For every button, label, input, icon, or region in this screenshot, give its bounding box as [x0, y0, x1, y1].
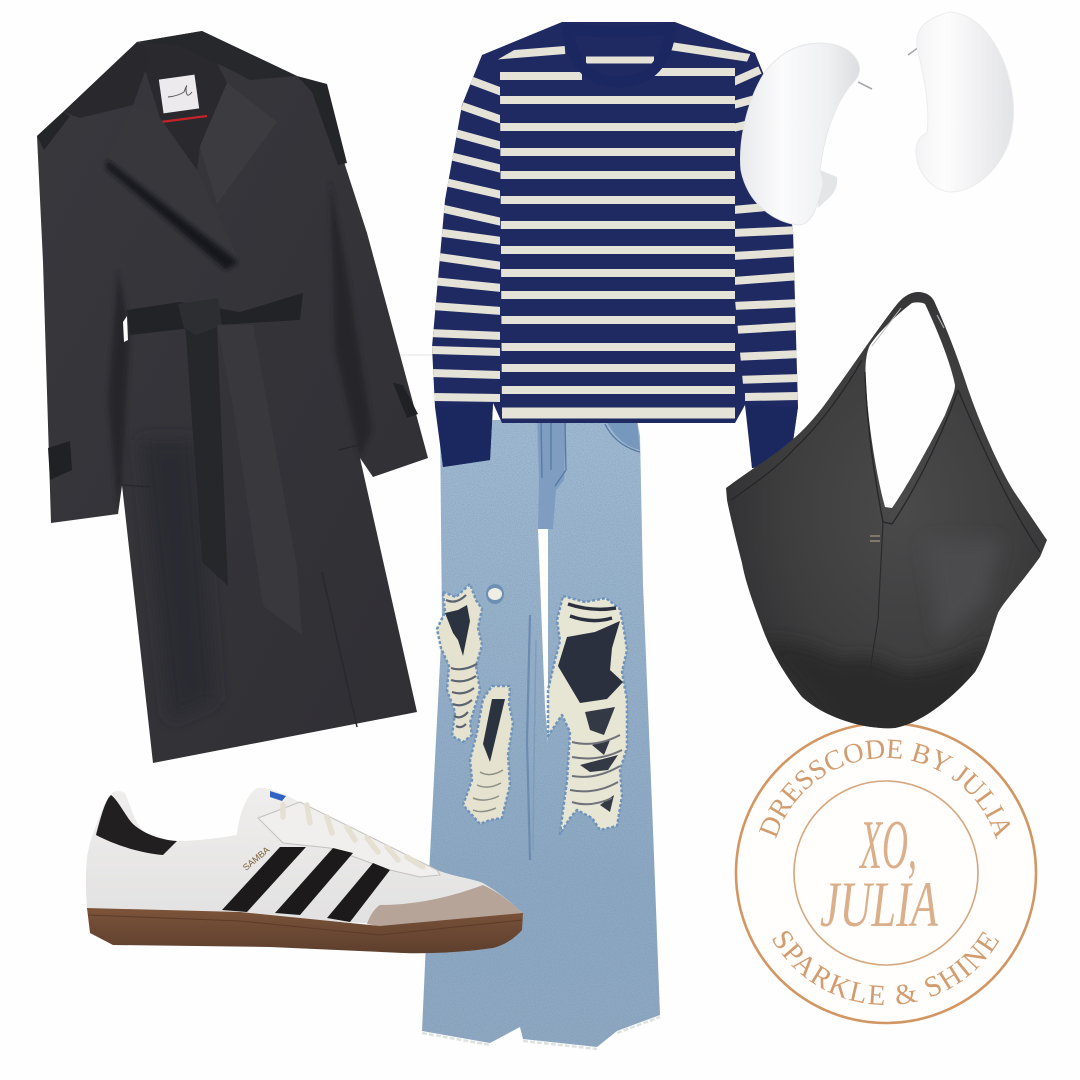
- garment label: [159, 75, 199, 113]
- suede toe: [367, 885, 523, 930]
- red neck tape: [161, 116, 207, 122]
- strap slits: [872, 308, 944, 346]
- coat shading: [108, 180, 372, 720]
- striped long sleeve top: [430, 22, 800, 468]
- right lapel: [200, 83, 277, 204]
- belt tail one: [185, 322, 228, 586]
- cuffs: [436, 403, 798, 468]
- shirt silhouette: [432, 22, 798, 468]
- right earring: [908, 12, 1014, 192]
- rip: left lower: [463, 686, 513, 824]
- black heel: [96, 795, 177, 855]
- left lapel: [107, 105, 240, 262]
- brand text top: DRESSCODE BY JULIA: [758, 739, 1010, 840]
- belt knot: [178, 298, 222, 335]
- blue logo: [270, 791, 286, 801]
- outer ring: [736, 723, 1036, 1023]
- frayed hem: [422, 1017, 660, 1049]
- rip: right knee: [548, 596, 627, 834]
- right sleeve stripes: [733, 70, 800, 397]
- bag trim: [731, 360, 1040, 552]
- inner ring: [794, 781, 978, 965]
- tagline bottom: SPARKLE & SHINE: [772, 931, 1000, 1006]
- jeans: [422, 420, 660, 1049]
- collar: [567, 25, 671, 82]
- epaulettes: [37, 76, 347, 165]
- signature: XO,: [859, 806, 917, 883]
- white gap: [123, 316, 128, 342]
- cuff tabs: [48, 383, 418, 480]
- back vent line: [322, 572, 357, 727]
- sneaker: [86, 788, 523, 953]
- belt: [127, 293, 303, 335]
- stripes: [222, 847, 390, 922]
- inner leg seam: [527, 615, 530, 860]
- bag body: [726, 292, 1047, 728]
- jeans body: [422, 420, 660, 1047]
- rip: left upper: [437, 584, 482, 742]
- crotch gap: [538, 529, 548, 742]
- coat silhouette: [37, 31, 428, 763]
- belt tail two: [217, 325, 302, 635]
- body stripes: [490, 46, 750, 413]
- neck interior: [137, 33, 227, 170]
- trench coat: [37, 31, 428, 763]
- signature: [820, 806, 939, 941]
- pocket lines: [122, 444, 363, 487]
- signature: JULIA: [820, 869, 939, 941]
- waistband and fly: [537, 420, 566, 529]
- upper collar: [137, 31, 297, 80]
- lower shadow: [764, 544, 994, 728]
- laces: [283, 805, 423, 867]
- neck interior: [570, 30, 668, 76]
- black leather bag: [726, 292, 1047, 740]
- left earring: [741, 43, 872, 225]
- sole: [87, 908, 523, 953]
- SAMBA label: SAMBA: [241, 845, 271, 873]
- silver earrings: [741, 12, 1014, 225]
- upper: [86, 788, 522, 925]
- centre seam: [862, 522, 883, 720]
- small rip: [486, 584, 504, 604]
- left sleeve stripes: [430, 80, 502, 398]
- brand mark: [870, 536, 880, 541]
- stamp logo: [734, 724, 1038, 1024]
- eyestay: [258, 802, 440, 877]
